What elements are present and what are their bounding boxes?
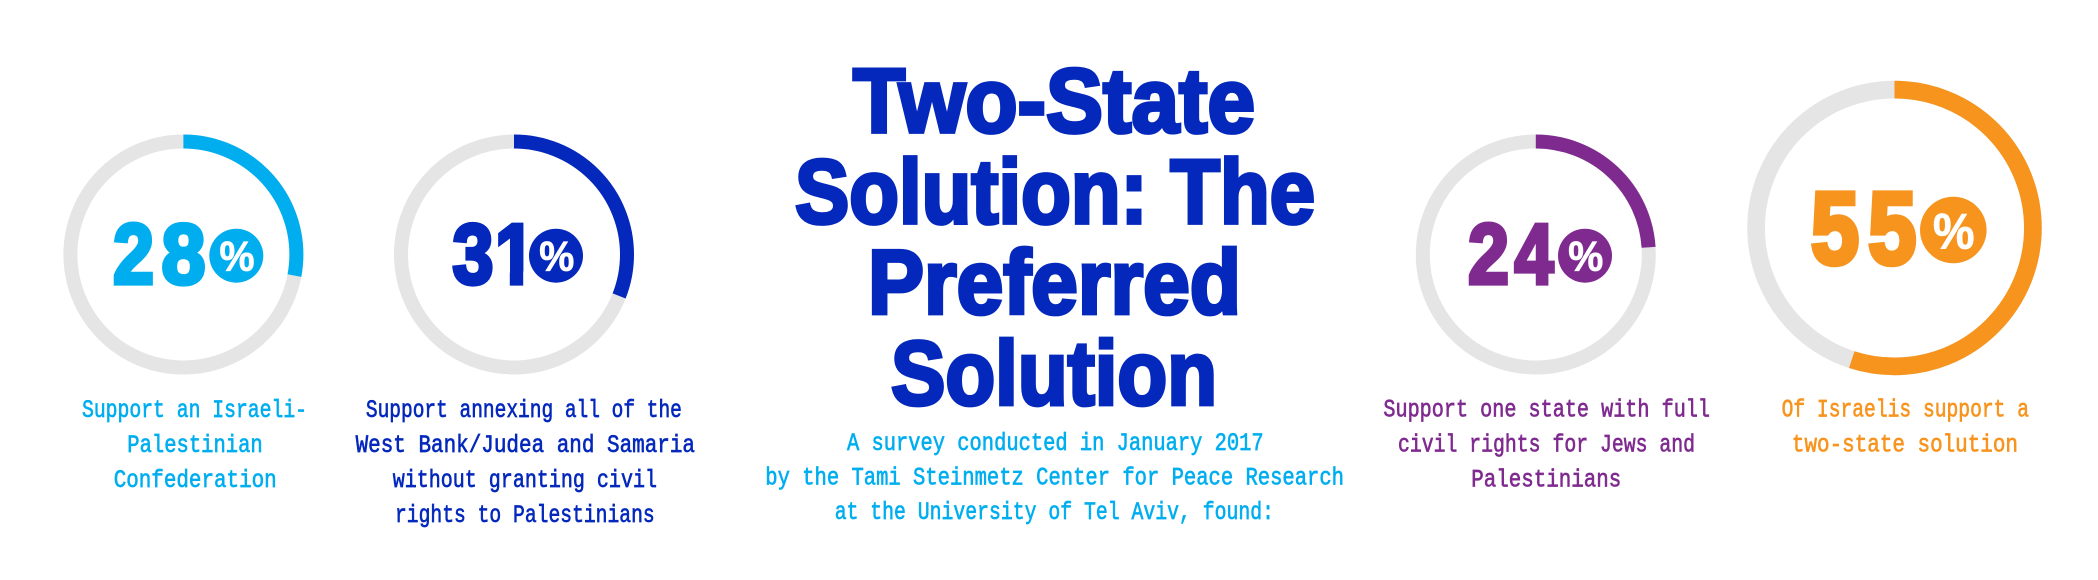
number: 24: 2	[1468, 208, 1509, 303]
number: 31: 1	[495, 208, 535, 303]
label: annexation: Support annexing all of the	[366, 396, 682, 425]
percent badge: %	[1568, 233, 1603, 280]
label: confederation: Support an Israeli-	[82, 396, 307, 425]
number: 28: 2	[113, 208, 154, 303]
subtitle: survey description: by the Tami Steinmetz Center for Peace Research	[765, 464, 1344, 492]
number: 55	[1811, 172, 1916, 286]
donut chart: 55%	[1756, 90, 2033, 366]
donut chart: 28%	[70, 142, 296, 368]
number: 24: 4	[1514, 208, 1554, 303]
number: 55: 5	[1868, 172, 1916, 286]
number: 31	[452, 208, 540, 303]
percent badge: %	[220, 233, 254, 280]
label: annexation	[356, 396, 695, 530]
percent badge: %	[539, 233, 574, 280]
label: annexation: rights to Palestinians	[395, 501, 655, 530]
title: Preferred	[868, 232, 1241, 334]
label: confederation: Palestinian	[127, 431, 263, 460]
label: annexation: without granting civil	[393, 466, 657, 495]
number: 28	[113, 208, 206, 303]
number: 55: 5	[1811, 172, 1859, 286]
label: confederation	[82, 396, 307, 495]
label: one state: Palestinians	[1471, 466, 1621, 494]
percent badge	[1920, 197, 1987, 263]
number: 28: 8	[162, 208, 206, 303]
percent badge	[1558, 229, 1612, 283]
subtitle: survey description: at the University of Tel Aviv, found:	[835, 498, 1274, 527]
label: two-state	[1782, 396, 2029, 460]
panel: 24% one state	[1383, 142, 1710, 494]
percent badge	[209, 229, 263, 283]
title: Solution: The	[795, 142, 1315, 243]
panel: 28% confederation	[70, 142, 307, 495]
title: Solution	[891, 324, 1217, 424]
donut chart: 31%	[401, 142, 627, 368]
number: 31: 3	[452, 208, 494, 303]
title	[795, 51, 1315, 424]
subtitle: survey description: A survey conducted in January 2017	[847, 429, 1264, 458]
label: one state: Support one state with full	[1383, 396, 1710, 424]
panel: 55% two-state	[1756, 90, 2033, 460]
label: two-state: Of Israelis support a	[1782, 396, 2029, 424]
label: two-state: two-state solution	[1792, 430, 2018, 460]
label: confederation: Confederation	[114, 466, 277, 495]
percent badge: %	[1933, 203, 1974, 259]
label: annexation: West Bank/Judea and Samaria	[356, 431, 695, 460]
donut chart: 24%	[1423, 142, 1649, 368]
percent badge	[529, 229, 583, 283]
panel: 31% annexation	[356, 142, 695, 530]
title: Two-State	[853, 51, 1255, 152]
label: one state	[1383, 396, 1710, 494]
subtitle: survey description	[765, 429, 1344, 527]
label: one state: civil rights for Jews and	[1398, 430, 1695, 460]
number: 24	[1468, 208, 1554, 303]
